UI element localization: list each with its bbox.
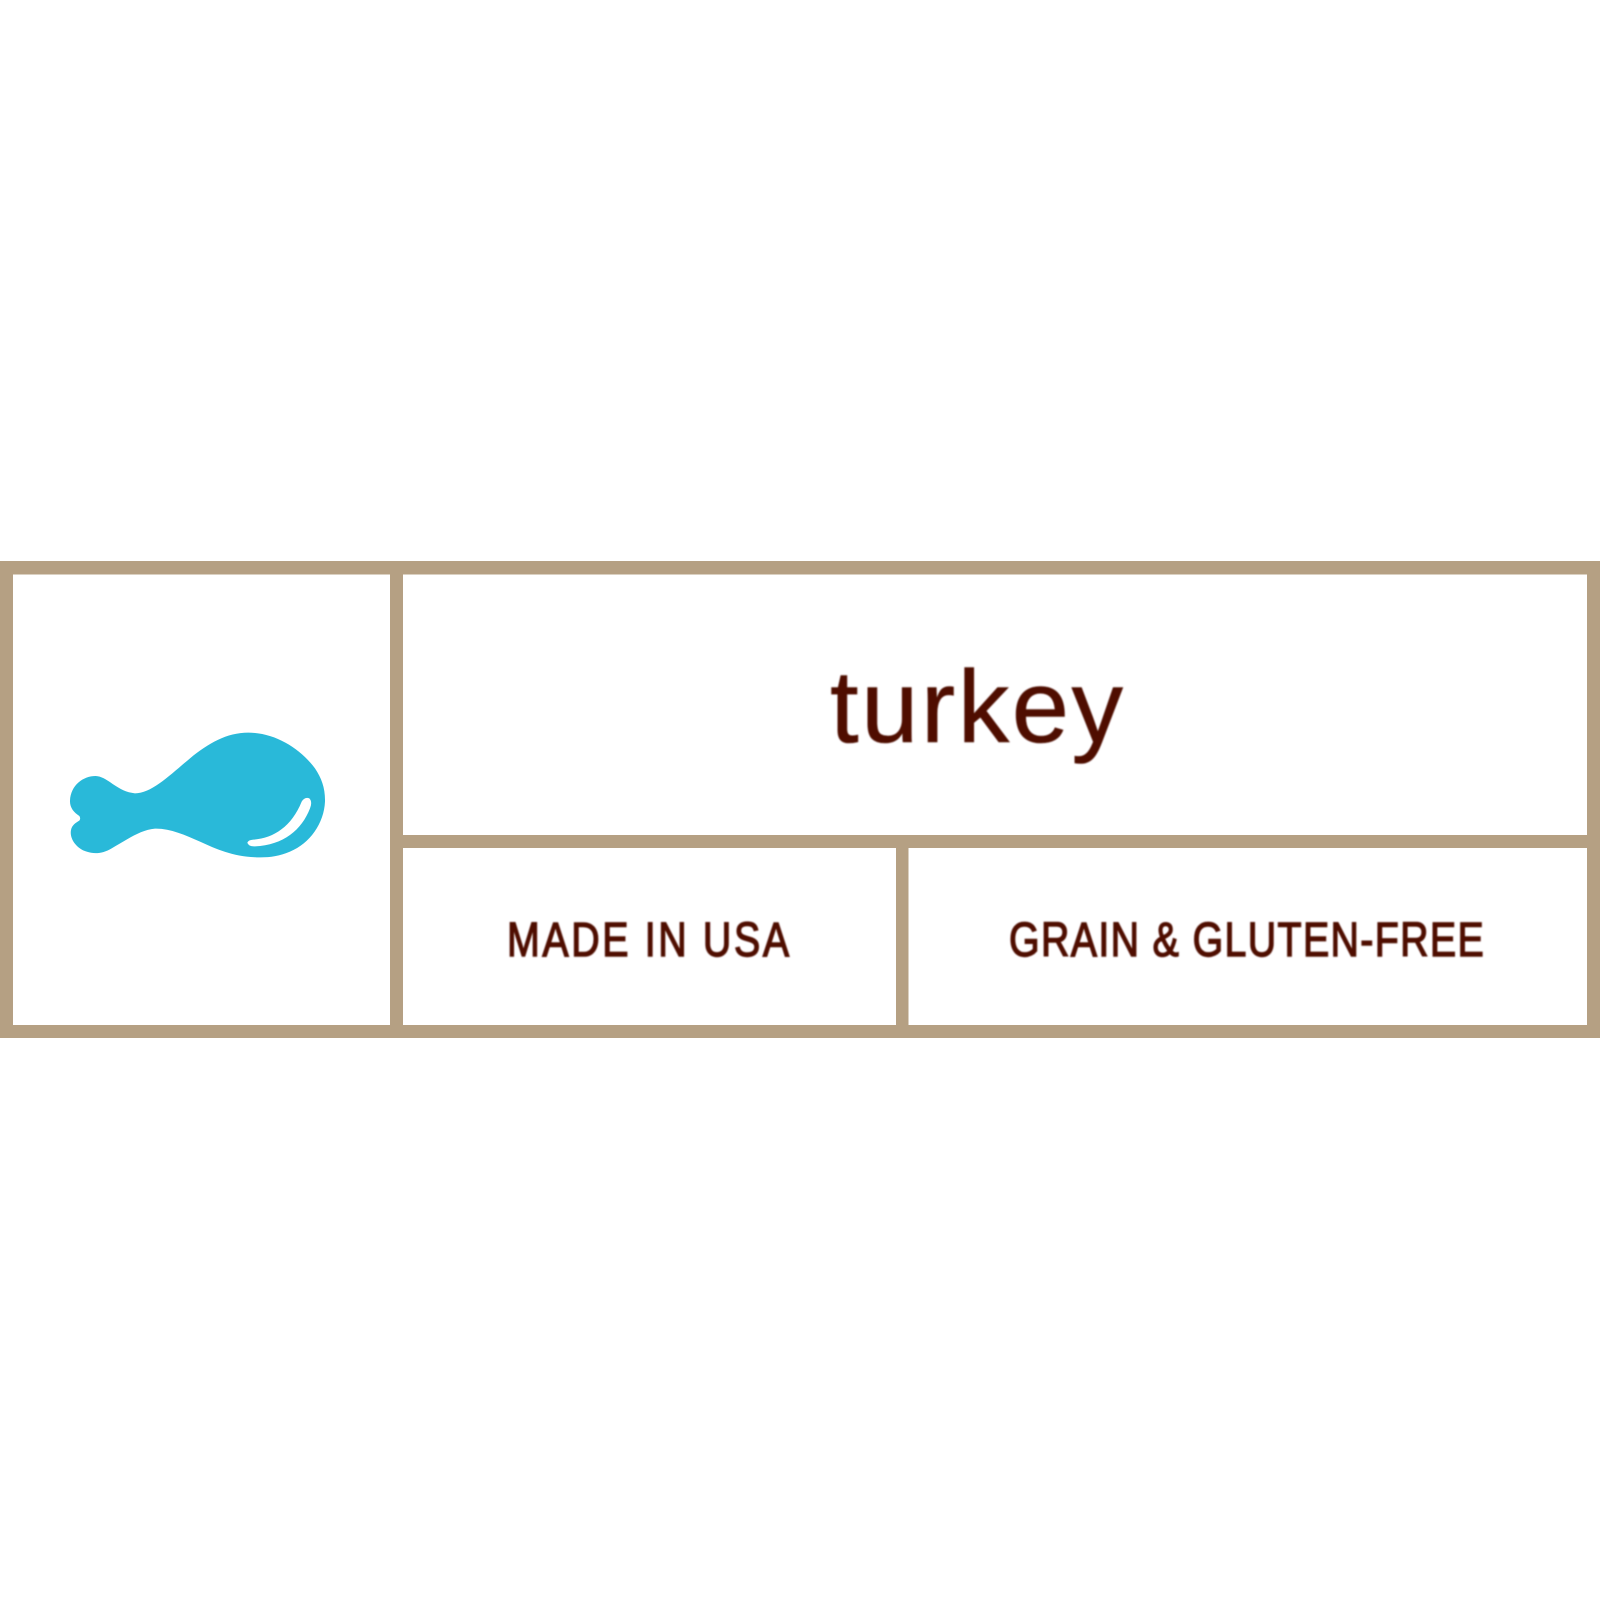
heading: turkey: turkey: [830, 649, 1124, 764]
panel: label frame: [0, 561, 1600, 1038]
text: made in usa: MADE IN USA: [507, 913, 790, 967]
icon: turkey drumstick: [70, 733, 325, 857]
text: grain and gluten free: GRAIN & GLUTEN-FREE: [1009, 913, 1484, 967]
